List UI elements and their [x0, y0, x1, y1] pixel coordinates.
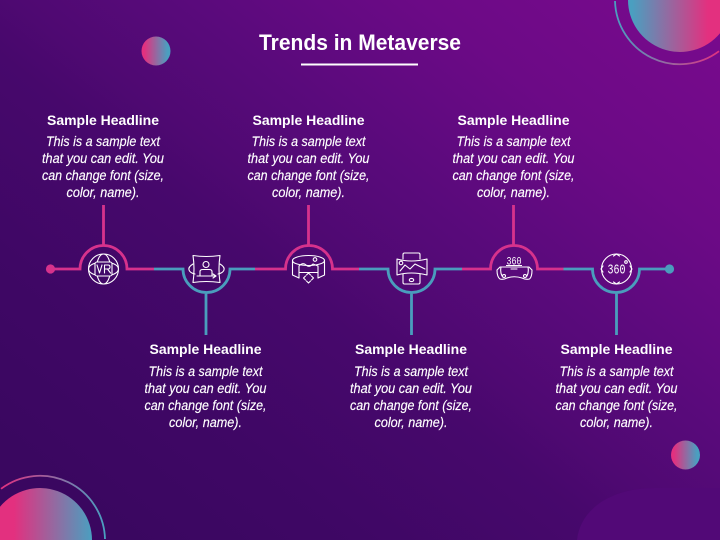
text block 4: Sample Headline [355, 341, 467, 357]
text block 6: Sample Headline [560, 341, 673, 357]
text block 4: can change font (size, [350, 398, 472, 413]
text block 1: This is a sample text [46, 134, 161, 149]
text block 3: color, name). [272, 185, 345, 200]
node 4 connector [359, 269, 462, 335]
icon: 360 circle [601, 254, 632, 284]
text block 6: that you can edit. You [556, 381, 678, 396]
text block 1: color, name). [66, 185, 140, 200]
node 3 connector [255, 205, 359, 269]
text block 2: This is a sample text [148, 364, 264, 379]
start dot [46, 264, 55, 274]
text block 2: can change font (size, [144, 398, 266, 413]
node 1 connector [50, 205, 154, 269]
text block 5: color, name). [477, 185, 550, 200]
title: Trends in Metaverse [259, 30, 461, 55]
text block 4: This is a sample text [354, 364, 469, 379]
text block 2: Sample Headline [150, 341, 262, 357]
text block 6 [556, 341, 678, 430]
text block 5: can change font (size, [452, 168, 574, 183]
node 2 connector [154, 269, 255, 335]
text block 4: color, name). [374, 415, 448, 430]
text block 6: can change font (size, [556, 398, 678, 413]
text block 3: Sample Headline [252, 112, 365, 128]
text block 5: that you can edit. You [452, 151, 575, 166]
decorative dot: bottom right [671, 440, 700, 470]
end dot [665, 264, 674, 274]
text block 2 [144, 341, 267, 430]
text block 5 [452, 112, 575, 200]
text block 3: can change font (size, [248, 168, 370, 183]
timeline [46, 205, 674, 335]
node 5 connector [462, 205, 564, 269]
text block 3: This is a sample text [252, 134, 367, 149]
background blob: bottom right [577, 488, 720, 540]
text block 5: Sample Headline [458, 112, 570, 128]
text block 3: that you can edit. You [248, 151, 370, 166]
text block 4 [350, 341, 472, 430]
decorative dot: top left [142, 36, 170, 66]
title underline [301, 64, 418, 66]
text block 1: can change font (size, [42, 168, 164, 183]
icon: VR globe [88, 254, 118, 284]
decorative circle: top right [615, 0, 720, 64]
text block 1 [42, 112, 164, 200]
decorative circle: bottom left [0, 476, 105, 540]
icon: 360 VR headset: 360 [506, 256, 522, 268]
text block 3 [248, 112, 370, 200]
node 6 connector [564, 269, 669, 335]
text block 4: that you can edit. You [350, 381, 472, 396]
text block 6: color, name). [580, 415, 653, 430]
text block 1: that you can edit. You [42, 151, 164, 166]
icon: 360 VR headset [497, 256, 532, 279]
text block 6: This is a sample text [560, 364, 675, 379]
text block 2: color, name). [169, 415, 242, 430]
text block 1: Sample Headline [47, 112, 159, 128]
icon: 360 panorama cylinder [292, 256, 324, 283]
icon: 360 circle: 360 [608, 262, 626, 278]
icon: virtual person frame [189, 256, 224, 282]
text block 2: that you can edit. You [144, 381, 267, 396]
icon: phones and panorama [397, 253, 427, 284]
text block 5: This is a sample text [456, 134, 572, 149]
